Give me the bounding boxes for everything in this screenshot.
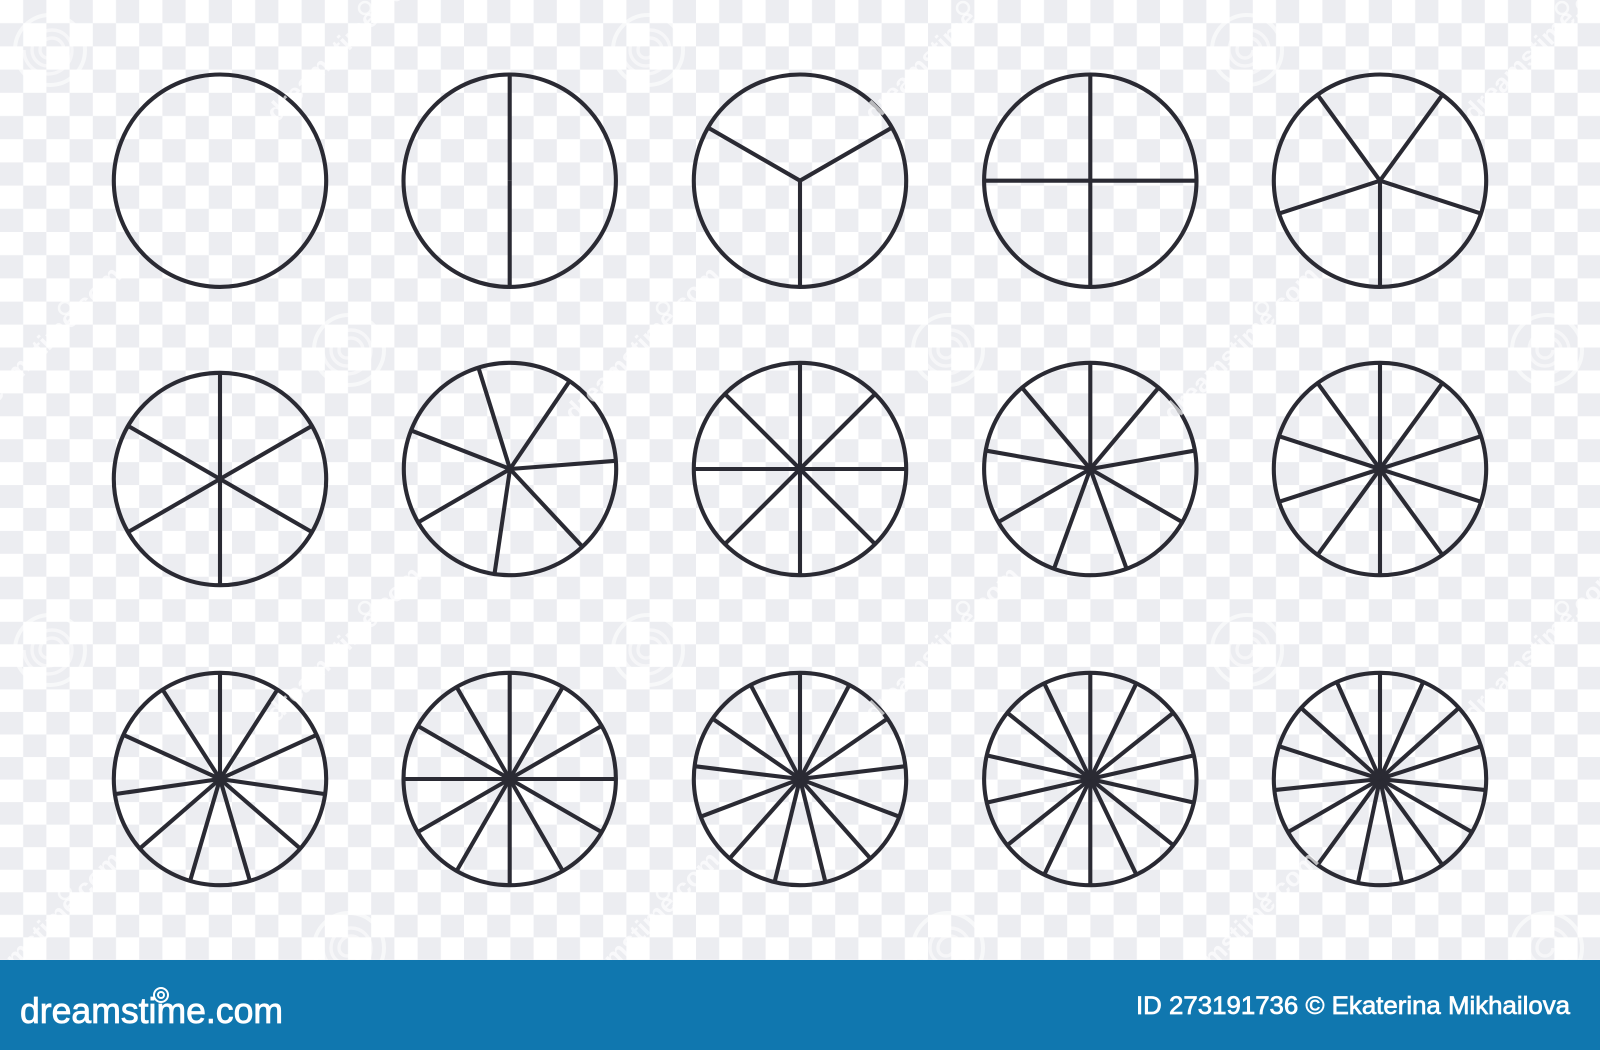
watermark: diagonal wordmarks: dreamstime.com bbox=[558, 260, 725, 427]
watermark: diagonal wordmarks: dreamstime.com bbox=[1157, 260, 1324, 427]
image ID and author credit: ID 273191736 © Ekaterina Mikhailova bbox=[1136, 992, 1570, 1020]
circle divided into 1 part bbox=[114, 74, 326, 287]
circle divided into 15 parts bbox=[1274, 673, 1486, 885]
circle divided into 12 parts bbox=[404, 673, 616, 885]
circle divided into 4 parts bbox=[984, 74, 1196, 287]
circle divided into 3 parts bbox=[694, 74, 906, 287]
circle divided into 14 parts bbox=[984, 673, 1196, 885]
watermark: diagonal wordmarks: dreamstime.com bbox=[260, 560, 427, 727]
circle divided into 10 parts bbox=[1274, 363, 1486, 575]
circle divided into 7 parts bbox=[404, 363, 616, 575]
circle divided into 9 parts bbox=[984, 363, 1196, 575]
watermark: diagonal wordmarks: dreamstime.com bbox=[858, 560, 1025, 727]
icon: logo spiral bbox=[154, 988, 168, 1002]
circle divided into 6 parts bbox=[114, 373, 326, 585]
circle divided into 5 parts bbox=[1274, 74, 1486, 287]
dreamstime logo wordmark: dreamstime.com bbox=[20, 990, 283, 1031]
watermark: diagonal wordmarks: dreamstime.com bbox=[1157, 845, 1324, 1012]
watermark: diagonal wordmarks: dreamstime.com bbox=[558, 845, 725, 1012]
footer banner bbox=[0, 960, 1600, 1050]
circle divided into 2 parts bbox=[404, 74, 616, 287]
circle divided into 13 parts bbox=[694, 673, 906, 885]
circle divided into 8 parts bbox=[694, 363, 906, 575]
circle divided into 11 parts bbox=[114, 673, 326, 885]
